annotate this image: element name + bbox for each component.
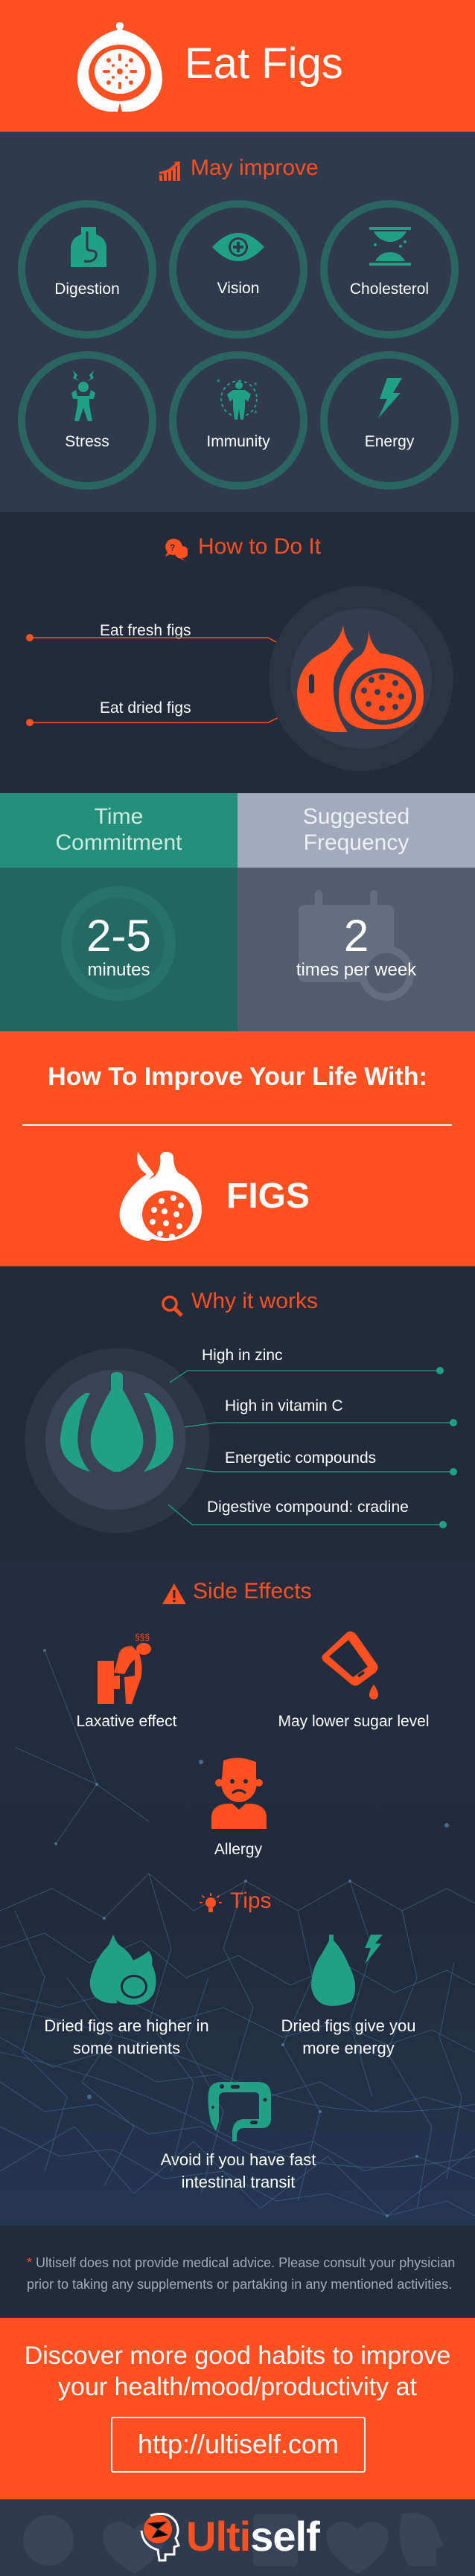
- side effect: laxative: [76, 1632, 177, 1730]
- benefit: immunity: [169, 351, 307, 490]
- benefit: immunity: *: [254, 380, 258, 391]
- icon: figs in circle: [269, 586, 453, 771]
- side effect: laxative: §§§: [135, 1632, 150, 1642]
- disclaimer: * Ultiself does not provide medical advice. Please consult your physician: [27, 2255, 455, 2270]
- tip: dried figs nutrients: Dried figs are higher in: [44, 2016, 209, 2035]
- benefit: cholesterol: Cholesterol: [350, 281, 429, 298]
- heading: why it works: Why it works: [191, 1289, 318, 1313]
- benefit: vision: Vision: [217, 280, 259, 297]
- text: figs: FIGS: [226, 1176, 310, 1216]
- heading: suggested frequency: Frequency: [304, 830, 409, 855]
- cta text: [25, 2342, 450, 2401]
- url button: [111, 2417, 366, 2473]
- stat: 2-5 minutes: 2-5: [86, 911, 151, 961]
- callout: digestive compound: Digestive compound: cradine: [207, 1499, 409, 1516]
- side effect: allergy: [211, 1758, 267, 1858]
- disclaimer: prior to taking any supplements or partaking in any mentioned activities.: [27, 2277, 452, 2292]
- heading: time commitment: [0, 793, 238, 868]
- stat: 2 times per week: [296, 911, 417, 980]
- panel: how to do it: [0, 512, 475, 793]
- icon: clock: [61, 886, 176, 1001]
- heading: time commitment: Commitment: [55, 830, 182, 855]
- heading: tips: [200, 1888, 272, 1913]
- benefit: cholesterol: [320, 200, 459, 339]
- side effect: sugar level: May lower sugar level: [278, 1713, 430, 1730]
- callout: energetic compounds: Energetic compounds: [225, 1449, 376, 1467]
- heading: suggested frequency: Suggested: [303, 804, 409, 829]
- disclaimer: [0, 2226, 475, 2318]
- side effect: allergy: Allergy: [214, 1841, 262, 1858]
- callout: eat dried figs: [26, 699, 278, 726]
- cta text: your health/mood/productivity at: [58, 2373, 417, 2401]
- callout: digestive compound: [168, 1499, 447, 1528]
- logo: Ultiself: [186, 2513, 319, 2560]
- benefit: digestion: Digestion: [54, 281, 120, 298]
- callout: eat fresh figs: [26, 622, 277, 643]
- icon: fig: [77, 22, 162, 112]
- call to action: [0, 2318, 475, 2499]
- tip: dried figs energy: Dried figs give you: [281, 2016, 415, 2035]
- callout: high in zinc: High in zinc: [202, 1347, 283, 1364]
- panel: may improve: [0, 132, 475, 512]
- callout: high in zinc: [170, 1347, 444, 1382]
- heading: time commitment: Time: [95, 804, 143, 829]
- header: [0, 0, 475, 132]
- benefit: vision: [169, 200, 307, 339]
- heading: side effects: Side Effects: [193, 1579, 312, 1603]
- footer: [0, 2499, 475, 2576]
- heading: may improve: May improve: [191, 156, 319, 180]
- stat: 2 times per week: times per week: [296, 960, 416, 980]
- tip: avoid fast transit: Avoid if you have fast: [161, 2150, 316, 2169]
- callout: high in vitamin c: High in vitamin C: [225, 1397, 343, 1414]
- panel: suggested frequency: [238, 793, 475, 1031]
- tip: avoid fast transit: [161, 2082, 316, 2191]
- panel: time commitment: [0, 793, 238, 1031]
- icon: calendar: [299, 890, 414, 1001]
- tip: dried figs energy: more energy: [302, 2039, 395, 2057]
- panel: how to improve your life: [0, 1031, 475, 1266]
- benefit: immunity: Immunity: [206, 433, 270, 450]
- tip: dried figs energy: [281, 1935, 415, 2057]
- tip: dried figs nutrients: [44, 1935, 209, 2057]
- heading: how to do it: ?: [170, 542, 175, 553]
- stat: 2 times per week: 2: [344, 911, 369, 961]
- side effect: sugar level: [278, 1631, 430, 1730]
- panel: why it works: [0, 1266, 475, 1561]
- benefit: energy: [320, 351, 459, 490]
- stat: 2-5 minutes: minutes: [87, 960, 150, 980]
- heading: tips: Tips: [230, 1888, 272, 1913]
- panel: side effects and tips: [0, 1561, 475, 2226]
- url button: http://ultiself.com: [138, 2429, 339, 2459]
- icon: fig in circle: [25, 1348, 209, 1533]
- heading: suggested frequency: [238, 793, 475, 868]
- side effect: laxative: Laxative effect: [76, 1713, 177, 1730]
- benefit: digestion: [18, 200, 156, 339]
- benefit: energy: Energy: [365, 433, 414, 450]
- callout: high in vitamin c: [185, 1397, 457, 1428]
- icon: figs white: [119, 1152, 202, 1241]
- benefit: immunity: *: [254, 408, 258, 419]
- heading: how to do it: How to Do It: [198, 534, 321, 559]
- callout: energetic compounds: [186, 1449, 457, 1476]
- cta text: Discover more good habits to improve: [25, 2342, 450, 2370]
- callout: eat dried figs: Eat dried figs: [100, 699, 191, 717]
- benefit: stress: [18, 351, 156, 490]
- benefit: stress: Stress: [65, 433, 109, 450]
- callout: eat fresh figs: Eat fresh figs: [100, 622, 191, 639]
- tip: avoid fast transit: intestinal transit: [182, 2173, 295, 2191]
- heading: How To Improve Your Life With:: [48, 1063, 427, 1091]
- tip: dried figs nutrients: some nutrients: [73, 2039, 180, 2057]
- title: Eat Figs: [185, 39, 343, 88]
